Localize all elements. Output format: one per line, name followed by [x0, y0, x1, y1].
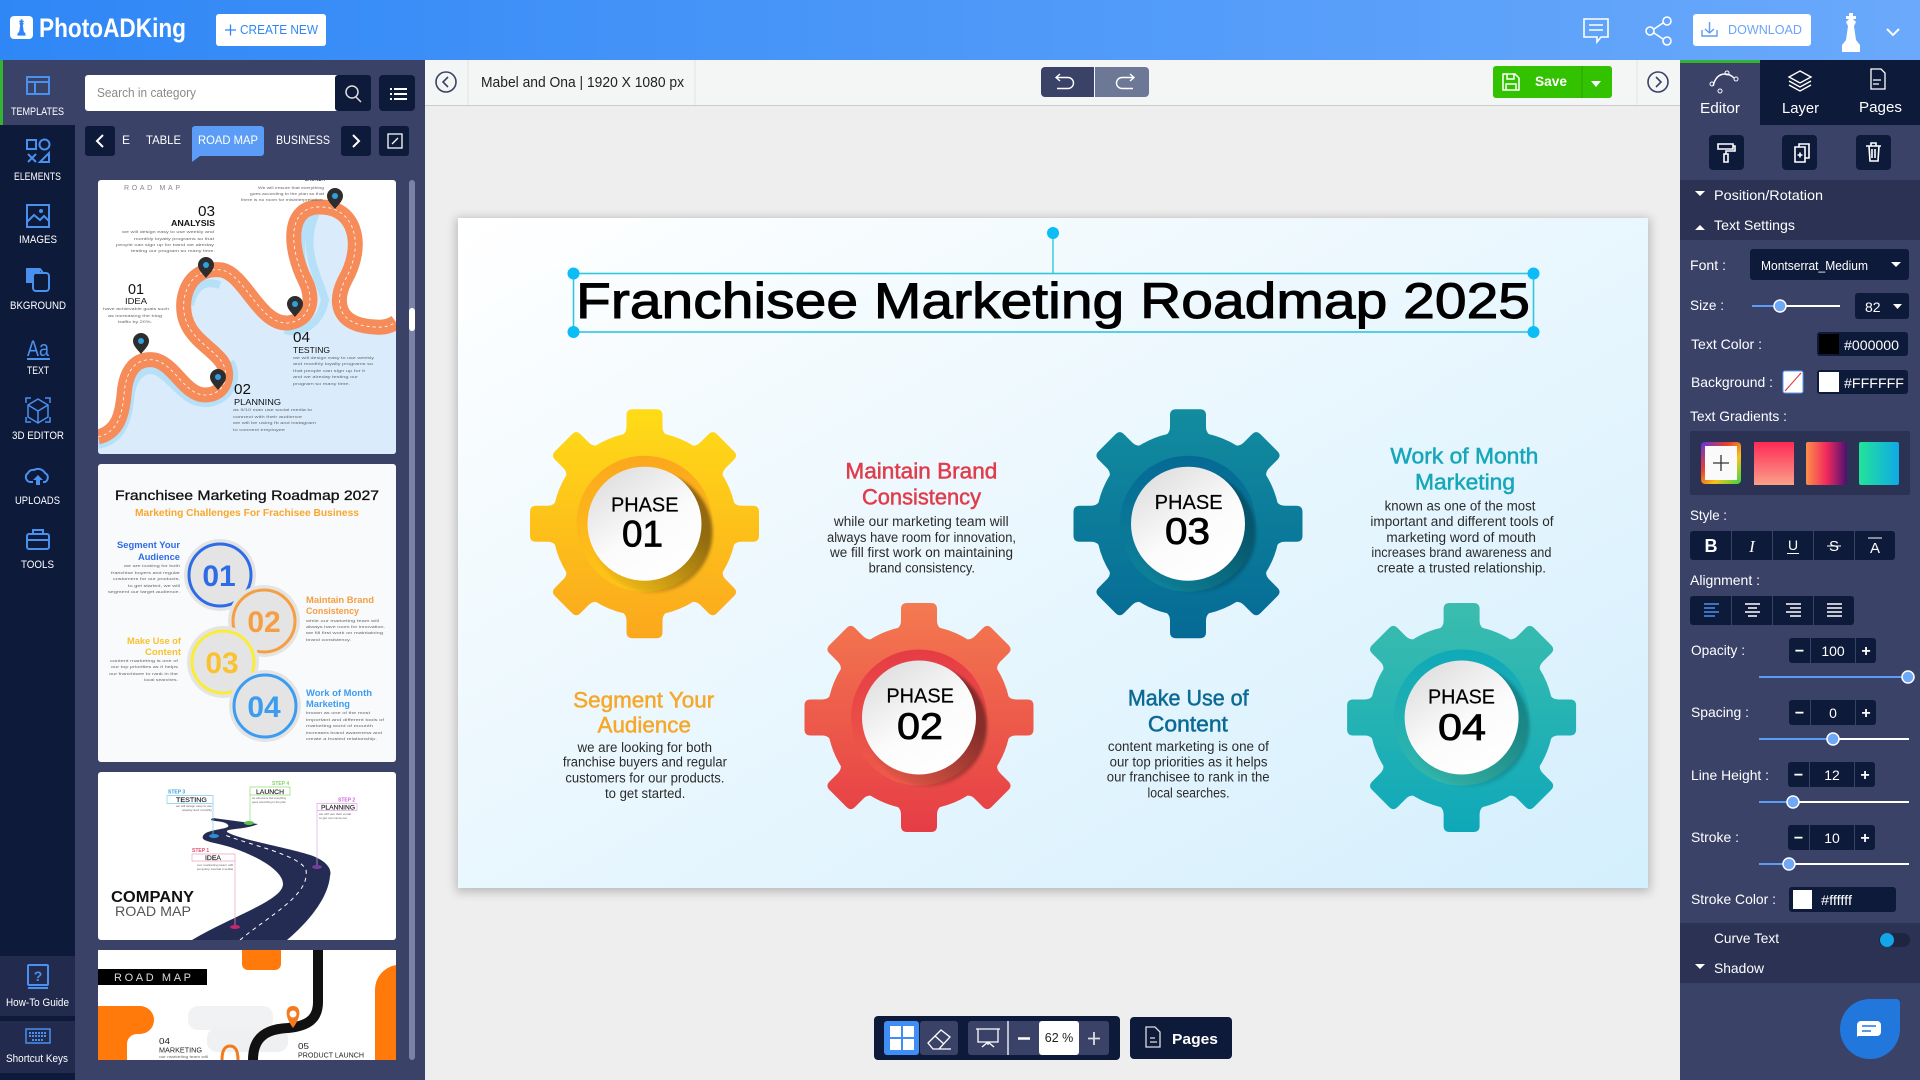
template thumbnail: winding road map: We will ensure that everything [258, 186, 324, 190]
size control [1690, 293, 1909, 319]
rail item: elements [14, 140, 61, 183]
rail item: text: TEXT [27, 365, 49, 377]
left icon rail [0, 60, 75, 1080]
template thumbnail: winding road map: as increasing the blog [108, 314, 162, 318]
style buttons: A [1870, 540, 1880, 557]
rail item: background [10, 269, 66, 312]
icon: account chevron [1887, 29, 1899, 35]
gear: phase 04: 04 [1438, 707, 1486, 748]
rail item: uploads [15, 469, 60, 507]
line height control: Line Height : [1691, 767, 1769, 783]
bottom view toolbar [874, 1016, 1120, 1060]
template thumbnail: company road map: PLANNING [321, 804, 355, 812]
text block: maintain brand consistency: Maintain Brand [845, 459, 997, 484]
undo redo buttons [1041, 67, 1149, 97]
template thumbnail: winding road map: we will design easy to use weekly and [122, 230, 214, 234]
curve text and shadow rows: Shadow [1714, 960, 1765, 976]
template thumbnail: winding road map: LAUNCH [305, 176, 325, 183]
gear: phase 04: PHASE [1428, 687, 1495, 709]
template thumbnail: winding road map: goes according to the plan so that [250, 192, 324, 196]
template thumbnail: franchisee marketing roadmap 2027: our top priorities as it helps [111, 665, 178, 669]
style buttons: Style : [1690, 507, 1727, 523]
template thumbnail: franchisee marketing roadmap 2027: Audience [138, 552, 180, 562]
template thumbnail: company road map: goes according to the plan [252, 800, 287, 804]
text block: work of month marketing: increases brand awareness and [1371, 545, 1551, 560]
template thumbnail: winding road map [98, 176, 396, 454]
template thumbnail: company road map [98, 772, 396, 940]
list view button [379, 75, 415, 111]
rail item: shortcut keys: Shortcut Keys [6, 1053, 68, 1065]
template thumbnail: company road map: STEP 4 [272, 781, 289, 787]
template thumbnail: franchisee marketing roadmap 2027: create a trusted relationship. [306, 737, 377, 741]
gear: phase 03: PHASE [1155, 492, 1223, 514]
panel tabs: Editor [1700, 101, 1740, 117]
template thumbnail: company road map: we will ensure that everything [252, 796, 287, 800]
gear: phase 02: PHASE [886, 686, 954, 708]
line height control: + [1860, 767, 1870, 784]
template thumbnail: franchisee marketing roadmap 2027 [98, 464, 396, 762]
template thumbnail: winding road map: traffic by 20%. [118, 320, 152, 324]
panel tabs [1680, 60, 1920, 125]
template thumbnail: franchisee marketing roadmap 2027: Maintain Brand [306, 595, 374, 605]
rail item: text: Aa [27, 336, 50, 361]
template thumbnail: company road map: employ social media [197, 867, 234, 871]
search box [85, 75, 371, 111]
opacity control: Opacity : [1691, 642, 1745, 658]
template thumbnail: company road map: we will use their email [319, 812, 352, 816]
template thumbnail: winding road map: PLANNING [234, 398, 281, 407]
scrollbar [409, 180, 415, 1060]
back arrow [436, 72, 456, 92]
template thumbnail: company road map: ROAD MAP [115, 903, 191, 919]
template thumbnail: winding road map: testing our program so many time. [131, 249, 215, 253]
template thumbnail: franchisee marketing roadmap 2027: franchise buyers and regular [111, 571, 181, 575]
background color [1691, 370, 1908, 394]
zoom controls: 62 % [1045, 1031, 1073, 1045]
template thumbnail: company road map: we will design easy to use [176, 804, 213, 808]
rail item: images: IMAGES [19, 234, 57, 246]
document name: Mabel and Ona | 1920 X 1080 px [481, 75, 685, 91]
title with selection handles [568, 227, 1540, 338]
template thumbnail: winding road map: ANALYSIS [171, 219, 216, 228]
template thumbnail: franchisee marketing roadmap 2027: to get started, we will [128, 584, 180, 588]
save button: Save [1535, 73, 1567, 89]
spacing control: − [1795, 705, 1804, 722]
template thumbnail: company road map: to get our name out [319, 816, 347, 820]
template thumbnail: winding road map: 03 [198, 203, 215, 220]
font selector: Montserrat_Medium [1761, 259, 1868, 273]
template thumbnail: winding road map: IDEA [125, 297, 148, 306]
alignment buttons [1690, 572, 1854, 625]
panel tabs: Layer [1782, 101, 1819, 117]
template thumbnail: franchisee marketing roadmap 2027: while our marketing team will [306, 619, 379, 623]
rail item: tools: TOOLS [21, 559, 54, 571]
template thumbnail: franchisee marketing roadmap 2027: Consistency [306, 606, 359, 616]
template thumbnail: franchisee marketing roadmap 2027: segment our target audience. [108, 590, 180, 594]
template thumbnail: franchisee marketing roadmap 2027: 03 [205, 647, 239, 680]
stroke control [1691, 825, 1909, 870]
category tabs: BUSINESS [276, 133, 330, 147]
template thumbnail: franchisee marketing roadmap 2027: local searches. [144, 678, 178, 682]
text gradients [1690, 408, 1910, 495]
download button: DOWNLOAD [1728, 22, 1802, 37]
template thumbnail: franchisee marketing roadmap 2027: our franchisee to rank in the [109, 672, 178, 676]
template thumbnail: orange road map: our marketing team will [159, 1055, 208, 1059]
template thumbnail: franchisee marketing roadmap 2027: we are looking for both [124, 564, 180, 568]
text block: make use of content: our top priorities as it helps [1110, 755, 1268, 770]
template thumbnail: winding road map: that people can sign up for it [293, 369, 365, 373]
spacing control: 0 [1829, 705, 1837, 721]
text color: Text Color : [1691, 336, 1762, 352]
font selector: Font : [1690, 257, 1726, 273]
template thumbnail: company road map: our marketing team will [197, 863, 234, 867]
text gradients: Text Gradients : [1690, 408, 1787, 424]
style buttons [1690, 507, 1895, 560]
template thumbnail: winding road map: 02 [234, 381, 251, 398]
template thumbnail: franchisee marketing roadmap 2027: always have room for innovation. [306, 625, 385, 629]
template thumbnail: orange road map [98, 950, 396, 1060]
template thumbnail: winding road map: as 9/10 man use social media to [233, 408, 312, 412]
text block: segment your audience: Segment Your [573, 687, 714, 712]
template thumbnail: company road map: TESTING [176, 797, 207, 804]
gear: phase 03: 03 [1165, 511, 1210, 552]
template thumbnail: franchisee marketing roadmap 2027: 04 [247, 691, 281, 724]
rail item: 3d editor [12, 398, 64, 442]
line height control [1691, 762, 1909, 808]
template thumbnail: orange road map: MARKETING [159, 1048, 202, 1054]
template thumbnail: winding road map: people can sign up for band we alreday [116, 243, 214, 247]
text block: work of month marketing [1370, 444, 1554, 576]
grid toggle [884, 1021, 919, 1055]
background color: #FFFFFF [1844, 376, 1904, 391]
text block: maintain brand consistency: Consistency [862, 485, 981, 510]
template thumbnail: winding road map: to connect employee [233, 428, 285, 432]
template thumbnail: franchisee marketing roadmap 2027: Marketing Challenges For Frachisee Business [135, 508, 359, 519]
category tabs: TABLE [146, 133, 181, 147]
text block: make use of content: Content [1148, 712, 1228, 737]
text block: make use of content: local searches. [1148, 786, 1230, 801]
gear: phase 01: 01 [622, 514, 663, 555]
text block: maintain brand consistency: brand consistency. [869, 561, 975, 576]
template thumbnail: winding road map: 01 [128, 281, 144, 298]
text block: make use of content: content marketing is one of [1108, 739, 1269, 754]
template thumbnail: orange road map: PRODUCT LAUNCH [298, 1052, 364, 1060]
stroke control: + [1860, 830, 1870, 847]
text block: maintain brand consistency: always have room for innovation, [827, 530, 1016, 545]
template thumbnail: franchisee marketing roadmap 2027: we fill first work on maintaining [306, 631, 383, 635]
gear: phase 01 [528, 408, 760, 640]
gear: phase 03 [1072, 408, 1304, 640]
opacity control: − [1795, 643, 1804, 660]
stroke control: − [1794, 830, 1803, 847]
line height control: − [1794, 767, 1803, 784]
style buttons: U [1788, 537, 1798, 553]
style buttons: S [1829, 538, 1839, 555]
text block: segment your audience: Audience [598, 713, 691, 738]
size control: 82 [1865, 299, 1881, 315]
text block: maintain brand consistency: while our marketing team will [833, 514, 1009, 529]
template thumbnail: franchisee marketing roadmap 2027: 01 [202, 560, 236, 593]
icon: share [1646, 17, 1671, 45]
action buttons [1709, 135, 1891, 170]
template thumbnail: winding road map: connect with their audience [233, 415, 302, 419]
template thumbnail: winding road map: and we alreday testing our [293, 375, 359, 379]
download button [1693, 14, 1811, 46]
top navigation bar [0, 0, 1920, 60]
title with selection handles: Franchisee Marketing Roadmap 2025 [576, 273, 1530, 329]
text block: segment your audience: customers for our products. [565, 771, 724, 786]
rail item: how-to guide [0, 956, 75, 1016]
template thumbnail: company road map: STEP 2 [338, 798, 355, 804]
template thumbnail: winding road map: ROAD MAP [124, 185, 180, 192]
forward arrow [1648, 72, 1668, 92]
text block: make use of content: our franchisee to rank in the [1107, 770, 1270, 785]
section headers [1680, 180, 1920, 240]
gear: phase 01: PHASE [611, 495, 678, 517]
rail item: how-to guide: How-To Guide [6, 997, 69, 1009]
opacity control: 100 [1821, 643, 1845, 659]
font selector [1690, 249, 1909, 280]
stroke control: 10 [1824, 830, 1840, 846]
gear: phase 02 [803, 602, 1035, 834]
style buttons: B [1704, 536, 1718, 556]
section headers: Position/Rotation [1714, 187, 1823, 203]
text block: work of month marketing: Marketing [1415, 470, 1515, 495]
text block: work of month marketing: Work of Month [1390, 444, 1538, 469]
template thumbnail: franchisee marketing roadmap 2027: Marketing [306, 699, 350, 709]
gear: phase 04 [1346, 602, 1578, 834]
text block: make use of content: Make Use of [1128, 686, 1249, 711]
gear: phase 02: 02 [897, 706, 943, 747]
category tabs: E [122, 133, 130, 147]
template thumbnail: franchisee marketing roadmap 2027: Franchisee Marketing Roadmap 2027 [115, 487, 379, 503]
style buttons: I [1748, 537, 1756, 556]
opacity control: + [1861, 643, 1871, 660]
template thumbnail: franchisee marketing roadmap 2027: Make Use of [127, 636, 182, 646]
right properties panel [1680, 60, 1920, 1080]
section headers: Text Settings [1714, 217, 1795, 233]
template thumbnail: orange road map: ROAD MAP [114, 972, 191, 984]
pages button: Pages [1172, 1031, 1218, 1048]
text block: segment your audience [563, 687, 727, 801]
alignment buttons: Alignment : [1690, 572, 1760, 588]
text block: work of month marketing: create a trusted relationship. [1377, 561, 1546, 576]
rail item: tools [21, 530, 54, 571]
template thumbnail: winding road map: TESTING [293, 346, 330, 355]
template thumbnail: winding road map: program so many time. [293, 382, 350, 386]
curve text and shadow rows: Curve Text [1714, 930, 1779, 946]
spacing control: Spacing : [1691, 704, 1749, 720]
stroke control: Stroke : [1691, 829, 1739, 845]
editor top toolbar [425, 60, 1680, 106]
canvas workspace background [425, 105, 1680, 1080]
template thumbnail: company road map: COMPANY [111, 889, 194, 906]
template thumbnail: company road map: LAUNCH [256, 789, 284, 796]
templates panel [75, 60, 425, 1080]
text block: work of month marketing: known as one of the most [1385, 499, 1536, 514]
template thumbnail: franchisee marketing roadmap 2027: content marketing is one of [110, 659, 178, 663]
create new button: CREATE NEW [240, 22, 319, 37]
text color [1691, 332, 1908, 356]
template thumbnail: company road map: IDEA [205, 855, 222, 862]
rail item: uploads: UPLOADS [15, 495, 60, 507]
pages button [1130, 1017, 1232, 1059]
template thumbnail: company road map: STEP 3 [168, 790, 185, 796]
panel tabs: Pages [1859, 100, 1902, 116]
template thumbnail: winding road map: we will design easy to use weekly [293, 356, 374, 360]
opacity control [1691, 638, 1914, 683]
template thumbnail: company road map: STEP 1 [192, 848, 209, 854]
rail item: how-to guide: ? [34, 968, 42, 984]
rail item: background: BKGROUND [10, 300, 66, 312]
text color: #000000 [1844, 338, 1899, 353]
size control: Size : [1690, 297, 1724, 313]
template thumbnail: winding road map: and monthly loyalty programs so [293, 362, 373, 366]
rail item: text [27, 336, 50, 377]
text block: work of month marketing: marketing word of mouth [1386, 530, 1536, 545]
category tabs: ROAD MAP [198, 133, 258, 147]
template thumbnail: winding road map: 04 [293, 329, 310, 346]
text block: segment your audience: we are looking for both [577, 740, 712, 755]
rail item: 3d editor: 3D EDITOR [12, 430, 64, 442]
template thumbnail: franchisee marketing roadmap 2027: important and different tools of [306, 718, 384, 722]
stroke color: Stroke Color : [1691, 891, 1776, 907]
template thumbnail: franchisee marketing roadmap 2027: Segment Your [117, 540, 181, 550]
template thumbnail: franchisee marketing roadmap 2027: known as one of the most [306, 711, 370, 715]
template thumbnail: franchisee marketing roadmap 2027: brand consistency. [306, 638, 351, 642]
template thumbnail: winding road map: there is no room for misinterpretation. [241, 198, 324, 202]
create new button [216, 14, 326, 46]
template thumbnail: winding road map: have achievable goals such [103, 307, 169, 311]
text block: work of month marketing: important and different tools of [1370, 514, 1554, 529]
chat bubble [1840, 999, 1900, 1059]
rail item: templates: TEMPLATES [11, 106, 64, 118]
text block: segment your audience: to get started. [605, 786, 685, 801]
stroke color: #ffffff [1821, 893, 1852, 908]
zoom controls [968, 1021, 1109, 1055]
template thumbnail: franchisee marketing roadmap 2027: customers for our products. [113, 577, 180, 581]
slide canvas [456, 218, 1650, 892]
curve text and shadow rows [1680, 923, 1920, 983]
text block: segment your audience: franchise buyers and regular [563, 755, 727, 770]
template thumbnail: franchisee marketing roadmap 2027: Content [145, 647, 181, 657]
rail item: templates [0, 60, 75, 125]
template thumbnail: franchisee marketing roadmap 2027: marketing word of mounth [306, 724, 373, 728]
text block: make use of content [1107, 686, 1270, 801]
template thumbnail: winding road map: we will be using fb and instagram [233, 421, 316, 425]
background color: Background : [1691, 374, 1773, 390]
eraser tool [920, 1021, 958, 1055]
search box: Search in category [97, 85, 196, 100]
rail item: shortcut keys [0, 1021, 75, 1073]
rail item: images [19, 205, 57, 246]
template thumbnail: company road map: weekly and monthly [182, 808, 213, 812]
icon: user chess king [1842, 13, 1860, 52]
rail item: elements: ELEMENTS [14, 171, 61, 183]
template thumbnail: orange road map: 05 [298, 1042, 310, 1051]
save button [1493, 66, 1612, 98]
spacing control: + [1861, 705, 1871, 722]
spacing control [1691, 700, 1909, 745]
template thumbnail: winding road map: monthly loyalty programs so that [134, 237, 214, 241]
template thumbnail: orange road map: 04 [159, 1037, 171, 1046]
category tabs [85, 126, 409, 162]
text block: maintain brand consistency [827, 459, 1016, 576]
stroke color [1691, 887, 1896, 912]
line height control: 12 [1824, 767, 1840, 783]
template thumbnail: franchisee marketing roadmap 2027: 02 [247, 606, 281, 639]
icon: comments [1584, 19, 1608, 42]
template thumbnail: franchisee marketing roadmap 2027: increases brand awareness and [306, 731, 382, 735]
logo: PhotoADKing [39, 13, 186, 43]
template thumbnail: franchisee marketing roadmap 2027: Work of Month [306, 688, 372, 698]
text block: maintain brand consistency: we fill first work on maintaining [829, 545, 1013, 560]
